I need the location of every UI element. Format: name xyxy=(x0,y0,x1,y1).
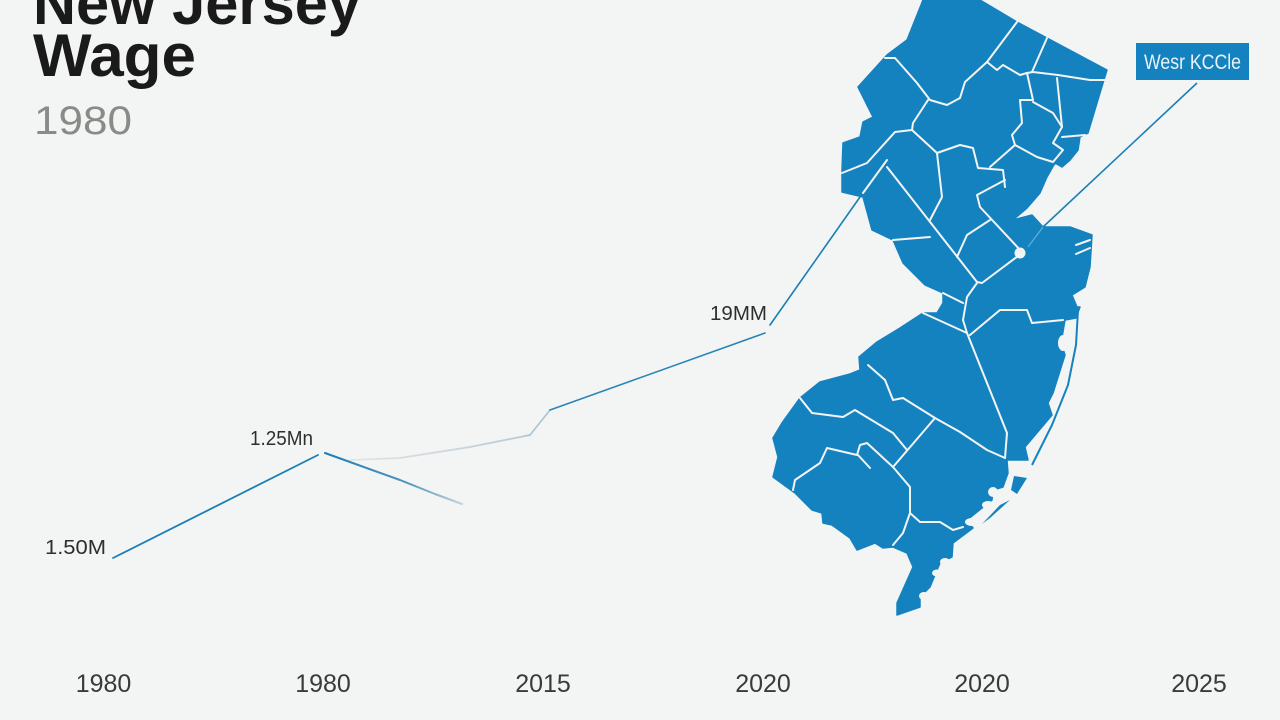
subtitle year: 1980 xyxy=(34,99,132,143)
line chart: wage trend xyxy=(113,197,860,558)
callout label: Wesr KCCle xyxy=(1144,51,1241,74)
map: New Jersey counties xyxy=(773,0,1107,615)
x axis years: 2020 xyxy=(954,670,1010,698)
coastal inlets xyxy=(919,335,1068,600)
x axis years: 2020 xyxy=(735,670,791,698)
x axis years: 2025 xyxy=(1171,670,1227,698)
x axis years: 2015 xyxy=(515,670,571,698)
title: Wage xyxy=(33,22,196,89)
data labels: 1.25Mn xyxy=(250,428,313,450)
state silhouette xyxy=(773,0,1107,615)
data labels: 1.50M xyxy=(45,537,106,559)
title xyxy=(33,0,362,89)
x axis years xyxy=(76,670,1227,698)
county borders xyxy=(793,22,1107,545)
data labels xyxy=(45,303,767,559)
callout connector xyxy=(1028,83,1197,247)
map marker xyxy=(1014,248,1026,258)
x axis years: 1980 xyxy=(295,670,351,698)
data labels: 19MM xyxy=(710,303,767,325)
x axis years: 1980 xyxy=(76,670,131,698)
barrier islands xyxy=(1032,310,1078,465)
callout label xyxy=(1136,43,1249,80)
